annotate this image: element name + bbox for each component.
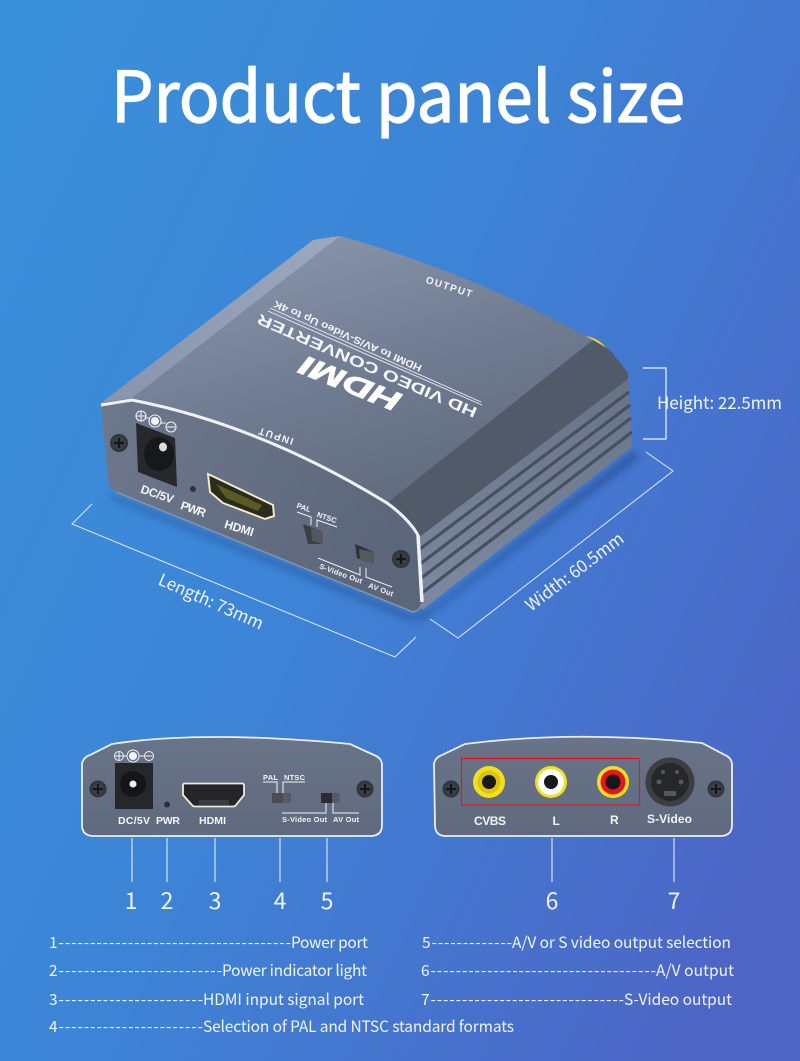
panel body bbox=[434, 737, 732, 836]
output label: OUTPUT bbox=[424, 275, 473, 300]
HDMI port bbox=[183, 784, 244, 806]
R connector bbox=[597, 766, 629, 798]
legend right column bbox=[421, 931, 734, 1010]
panel: input side bbox=[82, 737, 382, 836]
legend item 2: 2-------------------------- bbox=[49, 959, 222, 981]
legend item 7: S-Video output bbox=[624, 988, 732, 1010]
dimension: length: Length: 73mm bbox=[155, 566, 268, 635]
dimension: width: Width: 60.5mm bbox=[519, 525, 628, 616]
white edge highlight bbox=[101, 400, 418, 535]
labels: DC/5V bbox=[118, 815, 150, 827]
labels: AV Out bbox=[333, 815, 360, 824]
legend item 1: 1------------------------------------- bbox=[49, 931, 291, 953]
labels: S-Video bbox=[647, 812, 692, 826]
labels: PWR bbox=[156, 815, 180, 827]
labels bbox=[118, 773, 360, 827]
labels: PAL bbox=[263, 773, 278, 782]
switch PAL/NTSC bbox=[303, 524, 323, 544]
red highlight box bbox=[462, 758, 640, 805]
labels: NTSC bbox=[284, 773, 306, 782]
screw right bbox=[708, 780, 724, 798]
left chamfer bbox=[101, 236, 340, 403]
switch PAL/NTSC bbox=[272, 793, 291, 803]
front labels: PAL bbox=[296, 501, 312, 514]
callout numbers: 3 bbox=[209, 882, 221, 916]
dimension: height: Height: 22.5mm bbox=[657, 389, 782, 414]
legend item 3 bbox=[49, 988, 364, 1010]
CVBS connector bbox=[473, 766, 505, 798]
callout numbers: 1 bbox=[125, 882, 137, 916]
right side ribbed wall bbox=[387, 340, 632, 610]
polarity symbols bbox=[114, 750, 154, 762]
legend item 6: 6------------------------------------ bbox=[421, 959, 656, 981]
DC jack bbox=[136, 423, 177, 487]
screw right bbox=[356, 780, 374, 798]
dimension: length bbox=[72, 504, 416, 657]
DC jack bbox=[115, 763, 153, 809]
labels: L bbox=[552, 814, 560, 828]
converter name: HD VIDEO CONVERTER bbox=[254, 310, 480, 420]
screw right bbox=[392, 550, 410, 568]
panel body bbox=[82, 737, 382, 836]
legend left column bbox=[49, 931, 514, 1037]
title: Product panel size bbox=[111, 42, 685, 143]
legend item 1: Power port bbox=[291, 931, 368, 953]
callout leaders bbox=[132, 838, 674, 882]
labels: CVBS bbox=[474, 814, 506, 828]
power LED bbox=[190, 486, 196, 492]
main product illustration bbox=[101, 236, 638, 620]
HDMI port bbox=[208, 474, 274, 519]
power LED bbox=[164, 802, 170, 808]
callout numbers: 4 bbox=[274, 882, 287, 916]
polarity symbols bbox=[136, 411, 176, 432]
labels: S-Video Out bbox=[282, 815, 328, 824]
legend item 2 bbox=[49, 959, 367, 981]
screw left bbox=[442, 780, 460, 798]
yellow connector peeking out bbox=[584, 336, 611, 358]
legend item 5: A/V or S video output selection bbox=[512, 931, 731, 953]
front labels: AV Out bbox=[367, 581, 395, 598]
legend item 4: Selection of PAL and NTSC standard formats bbox=[203, 1015, 514, 1037]
callout numbers: 7 bbox=[668, 882, 680, 916]
legend item 3: HDMI input signal port bbox=[203, 988, 364, 1010]
legend item 2: Power indicator light bbox=[222, 959, 367, 981]
front labels bbox=[139, 482, 395, 598]
callout numbers: 5 bbox=[321, 882, 333, 916]
S-Video connector bbox=[646, 758, 694, 806]
front labels: PWR bbox=[179, 498, 208, 520]
L connector bbox=[535, 766, 567, 798]
screw left bbox=[90, 780, 106, 798]
panel: output side bbox=[434, 737, 732, 836]
callout numbers: 6 bbox=[546, 882, 558, 916]
callout numbers: 2 bbox=[161, 882, 173, 916]
labels: HDMI bbox=[199, 815, 226, 827]
switch S-Video/AV bbox=[355, 544, 374, 564]
legend item 5: 5------------- bbox=[422, 931, 512, 953]
top-face printing bbox=[254, 275, 482, 446]
dimension: width bbox=[430, 452, 673, 638]
legend item 7: 7------------------------------- bbox=[421, 988, 624, 1010]
labels bbox=[474, 812, 692, 828]
callout numbers bbox=[125, 882, 680, 916]
legend item 4 bbox=[49, 1015, 514, 1037]
front labels: HDMI bbox=[223, 517, 256, 539]
dimension: height bbox=[643, 368, 782, 439]
converter subtitle: HDMI to AV/S-Video Up to 4K bbox=[271, 297, 424, 373]
switch S-Video/AV bbox=[321, 793, 340, 803]
top face bbox=[132, 236, 593, 503]
input label: INPUT bbox=[257, 425, 295, 446]
front labels: S-Video Out bbox=[318, 562, 364, 586]
logo: HDMI: HDMI bbox=[295, 349, 405, 417]
legend item 4: 4----------------------- bbox=[49, 1015, 203, 1037]
screw left bbox=[110, 434, 128, 452]
front labels: NTSC bbox=[316, 510, 338, 525]
labels: R bbox=[610, 813, 619, 827]
legend item 3: 3----------------------- bbox=[49, 988, 203, 1010]
front labels: DC/5V bbox=[139, 482, 176, 506]
legend item 7 bbox=[421, 988, 732, 1010]
device shadow bbox=[110, 450, 638, 620]
front face bbox=[101, 398, 422, 612]
legend item 6: A/V output bbox=[656, 959, 734, 981]
